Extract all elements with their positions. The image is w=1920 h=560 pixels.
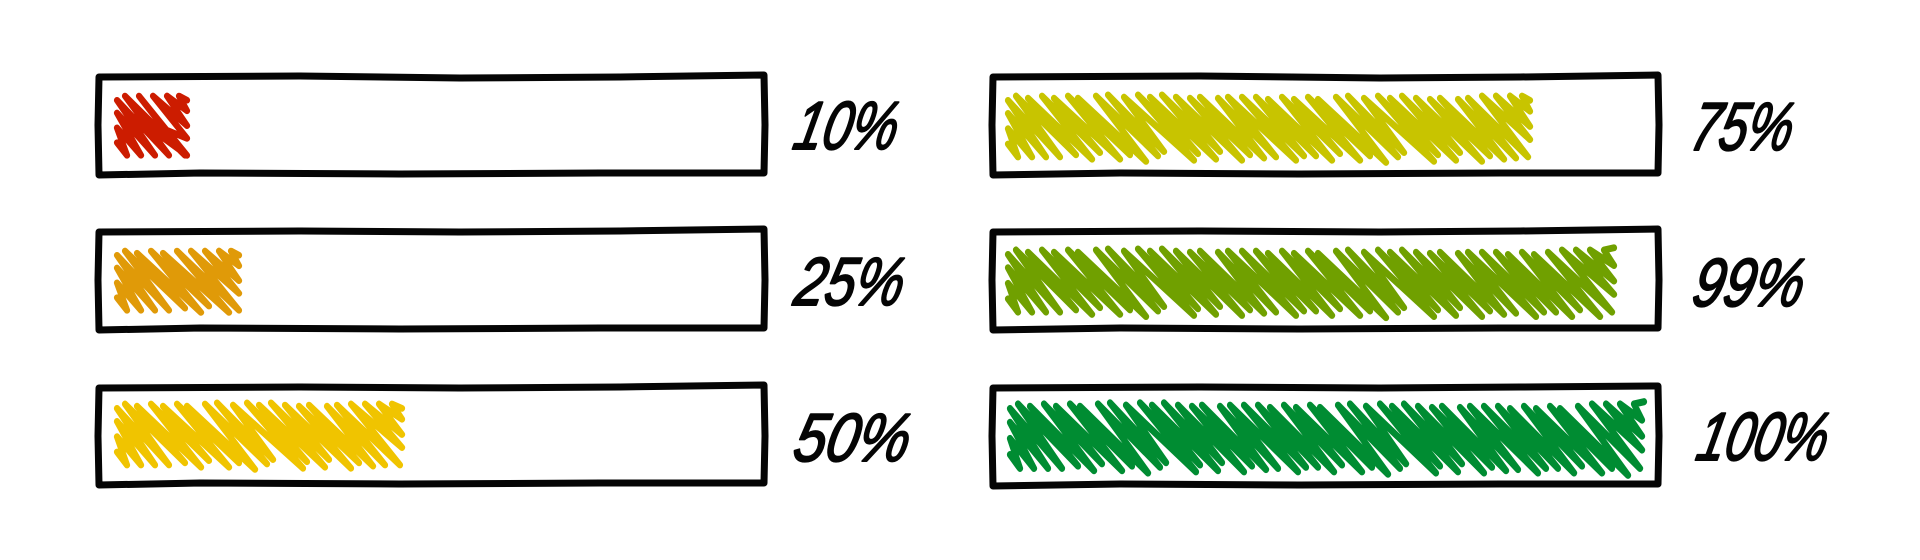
frame: 99% bar outline xyxy=(992,229,1659,330)
label: 10%: 10% xyxy=(788,88,907,164)
scribble fill: green 99% xyxy=(1008,248,1614,318)
scribble fill: orange 25% xyxy=(117,251,239,312)
scribble fill: red 10% xyxy=(117,96,187,155)
panel: progress bar 10% xyxy=(98,75,907,175)
scribble fill: yellow 50% xyxy=(117,403,402,469)
label: 75%: 75% xyxy=(1685,89,1802,165)
panel: progress bar 75% xyxy=(992,75,1802,175)
frame: 50% bar outline xyxy=(98,385,765,485)
frame: 75% bar outline xyxy=(992,75,1659,175)
scribble fill: dark green 100% xyxy=(1010,402,1644,475)
label: 50%: 50% xyxy=(788,400,919,476)
panel: progress bar 50% xyxy=(98,385,919,485)
frame: 10% bar outline xyxy=(98,75,765,175)
panel: progress bar 99% xyxy=(992,229,1813,330)
label: 100%: 100% xyxy=(1691,399,1837,475)
frame: 25% bar outline xyxy=(98,229,765,330)
panel: progress bar 100% xyxy=(992,386,1837,486)
panel: progress bar 25% xyxy=(98,229,913,330)
label: 25%: 25% xyxy=(788,244,913,320)
scribble fill: olive yellow 75% xyxy=(1008,95,1530,162)
frame: 100% bar outline xyxy=(992,386,1659,486)
label: 99%: 99% xyxy=(1687,245,1813,321)
